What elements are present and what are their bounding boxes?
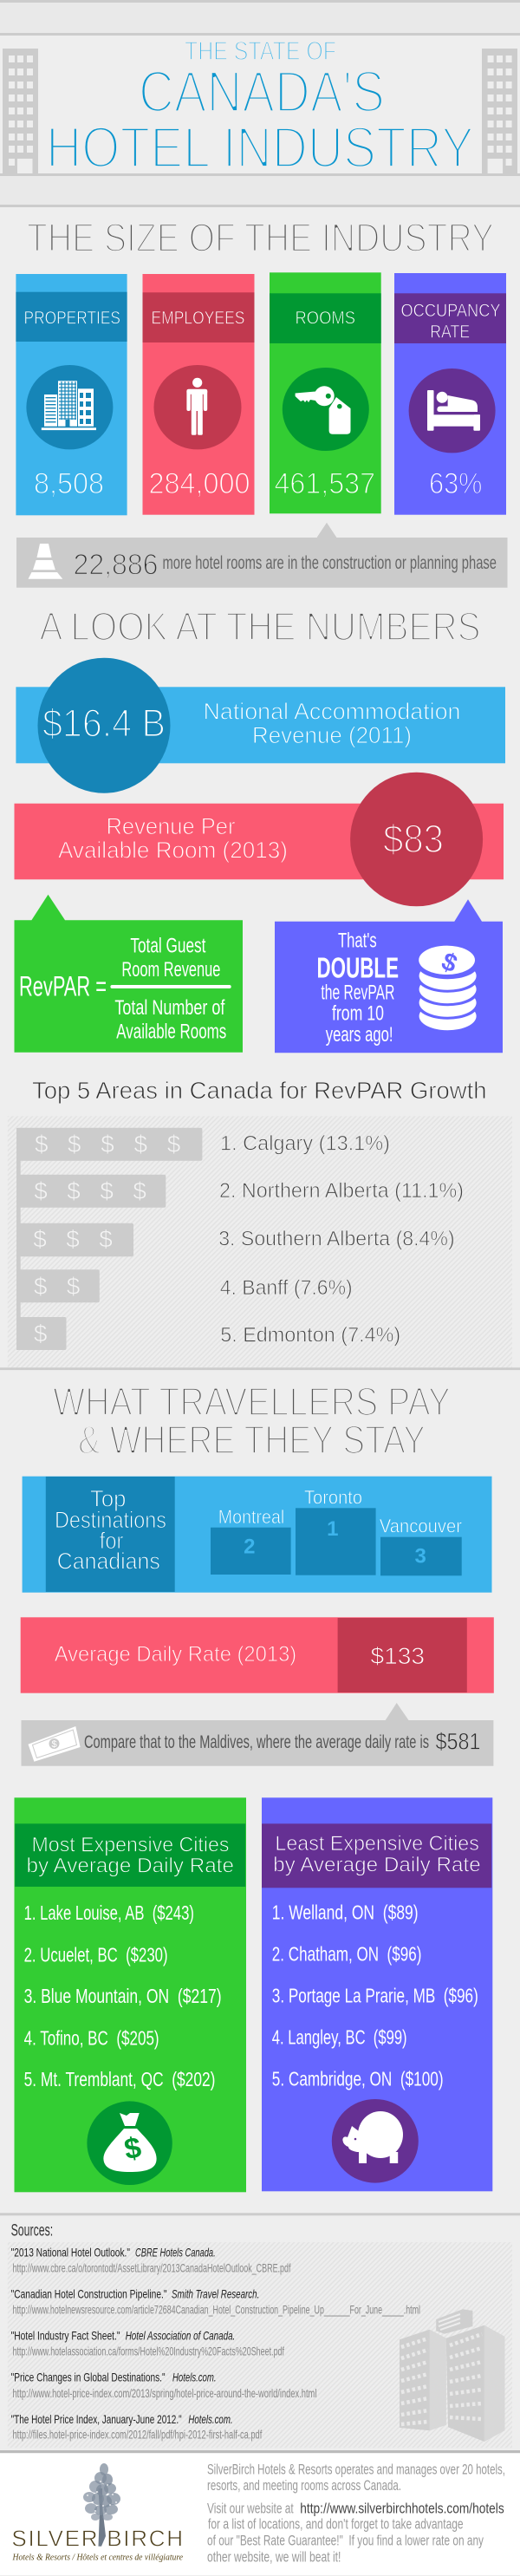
text: double the revpar message: That's	[338, 929, 377, 953]
panel: top 5 areas bar chart	[8, 1116, 512, 1367]
bar: calgary: $	[134, 1131, 148, 1158]
heading: least expensive cities: Least Expensive Cities	[275, 1832, 479, 1855]
number: 22,886: 22,886	[73, 548, 158, 581]
text: top destinations for canadians: for	[100, 1528, 123, 1554]
icon: traffic cone	[28, 544, 62, 579]
text: double the revpar message: DOUBLE	[317, 951, 399, 983]
podium: montreal	[211, 1506, 291, 1575]
text: about silverbirch: resorts, and meeting rooms across Canada.	[207, 2477, 401, 2494]
number: $133: $133	[371, 1643, 425, 1669]
list: least expensive cities: 2. Chatham, ON ($96)	[272, 1942, 421, 1965]
panel: properties	[16, 274, 127, 515]
bar: edmonton	[16, 1317, 400, 1350]
source 4	[11, 2371, 316, 2400]
label: occupancy rate: RATE	[430, 322, 470, 342]
number: employees: 284,000	[149, 467, 250, 500]
icon: coin stack: $	[438, 948, 461, 979]
text: top destinations for canadians	[55, 1486, 166, 1575]
text: national accommodation revenue: Revenue (2011)	[252, 722, 412, 748]
text: numerator: Room Revenue	[121, 958, 220, 981]
text: about silverbirch	[207, 2461, 505, 2566]
source 3: "Hotel Industry Fact Sheet."	[11, 2329, 120, 2343]
text: national accommodation revenue: National Accommodation	[203, 699, 461, 725]
bar: southern alberta: $	[33, 1226, 47, 1252]
source 3: Hotel Association of Canada.	[126, 2329, 235, 2343]
icon: banknote	[28, 1726, 81, 1762]
text: top destinations for canadians: Top	[90, 1486, 126, 1512]
number: $83: $83	[383, 817, 444, 861]
podium: montreal: Montreal	[218, 1506, 284, 1528]
panel: sources list	[8, 2242, 512, 2448]
list: least expensive cities: 4. Langley, BC ($99)	[272, 2026, 407, 2049]
label: properties: PROPERTIES	[24, 308, 120, 328]
bar: southern alberta: 3. Southern Alberta (8.4%)	[218, 1228, 455, 1250]
podium: vancouver	[380, 1516, 462, 1575]
panel: average daily rate	[21, 1617, 494, 1693]
number: occupancy rate: 63%	[429, 467, 482, 500]
icon: birch tree	[83, 2463, 120, 2547]
logo: silverbirch: Hotels & Resorts / Hôtels et centres de villégiature	[12, 2552, 183, 2562]
list: least expensive cities	[272, 1901, 478, 2090]
bar: calgary	[16, 1128, 390, 1161]
panel: top destinations	[23, 1477, 492, 1593]
list: most expensive cities: 5. Mt. Tremblant, QC ($202)	[24, 2068, 215, 2090]
source 1: "2013 National Hotel Outlook."	[11, 2246, 130, 2260]
source 1: CBRE Hotels Canada.	[135, 2246, 216, 2260]
heading: top 5 areas: Top 5 Areas in Canada for RevPAR Growth	[32, 1077, 487, 1104]
heading: least expensive cities: by Average Daily Rate	[273, 1854, 481, 1877]
bar: northern alberta	[16, 1175, 464, 1208]
label: occupancy rate: OCCUPANCY	[400, 301, 501, 321]
panel: occupancy rate	[394, 273, 506, 515]
bar: southern alberta: $	[99, 1226, 113, 1252]
bar: northern alberta: $	[34, 1177, 48, 1204]
title: THE STATE OF	[185, 36, 336, 66]
logo: silverbirch	[11, 2463, 183, 2562]
title	[46, 36, 474, 180]
callout: maldives comparison	[21, 1703, 493, 1766]
list: most expensive cities: 1. Lake Louise, AB ($243)	[24, 1901, 194, 1924]
heading: what travellers pay: & WHERE THEY STAY	[78, 1417, 426, 1462]
panel: double the revpar	[275, 899, 503, 1053]
bar: calgary: $	[35, 1131, 49, 1158]
bar: northern alberta: $	[100, 1177, 114, 1204]
bar: banff: $	[67, 1273, 81, 1300]
podium: toronto: 1	[327, 1517, 338, 1541]
source 1	[11, 2246, 291, 2275]
icon: right hotel building	[482, 49, 517, 173]
bar: banff	[16, 1269, 353, 1302]
text: double the revpar message: from 10	[332, 1002, 384, 1026]
icon: room key and tag	[283, 368, 369, 451]
list: least expensive cities: 5. Cambridge, ON ($100)	[272, 2067, 444, 2090]
icon: piggy bank	[332, 2099, 419, 2183]
icon: left hotel building	[3, 49, 38, 173]
heading: least expensive cities	[273, 1832, 481, 1877]
bar: southern alberta	[16, 1223, 455, 1256]
text: numerator	[121, 935, 220, 981]
panel: revpar formula	[14, 895, 243, 1053]
source 1: http://www.cbre.ca/o/torontodt/AssetLibrary/2013CanadaHotelOutlook_CBRE.pdf	[12, 2261, 291, 2275]
icon: person	[154, 365, 241, 449]
text: revpar: RevPAR =	[19, 970, 107, 1001]
list: most expensive cities	[24, 1901, 222, 2090]
number: $581: $581	[435, 1729, 480, 1755]
bar: southern alberta: $	[66, 1226, 80, 1252]
bar: northern alberta: $	[67, 1177, 81, 1204]
panel: national accommodation revenue	[16, 658, 505, 793]
panel: most expensive cities	[14, 1797, 246, 2192]
header banner	[0, 0, 520, 207]
source 5: "The Hotel Price Index, January-June 2012."	[11, 2412, 182, 2426]
source 4: Hotels.com.	[172, 2371, 217, 2384]
source 5: Hotels.com.	[188, 2412, 233, 2426]
text: denominator: Total Number of	[114, 996, 225, 1020]
label: occupancy rate	[400, 301, 501, 342]
icon: money bag	[87, 2101, 172, 2185]
title: CANADA'S	[139, 59, 385, 125]
bar: edmonton: $	[34, 1320, 48, 1347]
bar: edmonton: 5. Edmonton (7.4%)	[220, 1324, 400, 1347]
text: double the revpar message	[317, 929, 399, 1047]
bar: calgary: 1. Calgary (13.1%)	[220, 1132, 390, 1155]
icon: faded hotel building	[400, 2309, 504, 2442]
heading: most expensive cities: by Average Daily Rate	[26, 1855, 234, 1878]
podium: montreal: 2	[244, 1535, 255, 1558]
label: employees: EMPLOYEES	[151, 308, 244, 328]
list: most expensive cities: 3. Blue Mountain, ON ($217)	[24, 1985, 222, 2007]
text: revenue per available room: Available Room (2013)	[58, 838, 288, 864]
text: about silverbirch: other website, we will beat it!	[207, 2549, 341, 2566]
icon: coin stack	[418, 946, 478, 1030]
heading: most expensive cities: Most Expensive Cities	[31, 1833, 229, 1856]
number: properties: 8,508	[34, 467, 104, 500]
podium: vancouver: Vancouver	[380, 1516, 462, 1537]
source 4: http://www.hotel-price-index.com/2013/spring/hotel-price-around-the-world/index.html	[12, 2386, 316, 2400]
source 2: Smith Travel Research.	[172, 2287, 259, 2301]
text: about silverbirch: Visit our website at	[207, 2500, 294, 2516]
text: denominator	[114, 996, 226, 1044]
podium: vancouver: 3	[415, 1545, 426, 1568]
icon: office buildings	[26, 365, 113, 449]
heading: sources: Sources:	[11, 2221, 53, 2240]
panel: employees	[142, 274, 255, 515]
source 2	[11, 2287, 420, 2317]
text: revenue per available room	[58, 813, 288, 864]
number: $16.4 B: $16.4 B	[42, 701, 166, 746]
icon: person in bed	[409, 368, 496, 453]
text: top destinations for canadians: Destinations	[55, 1507, 166, 1533]
text: numerator: Total Guest	[130, 935, 206, 958]
bar: calgary: $	[68, 1131, 81, 1158]
bar: calgary: $	[101, 1131, 114, 1158]
text: national accommodation revenue	[203, 699, 461, 748]
source 5	[11, 2412, 262, 2442]
number: rooms: 461,537	[274, 467, 375, 500]
heading: what travellers pay	[53, 1379, 451, 1462]
callout: rooms in construction	[16, 523, 508, 588]
panel: least expensive cities	[262, 1797, 492, 2191]
icon: banknote: $	[51, 1739, 57, 1750]
text: double the revpar message: years ago!	[326, 1023, 393, 1047]
bar: calgary: $	[167, 1131, 181, 1158]
source 3: http://www.hotelassociation.ca/forms/Hotel%20Industry%20Facts%20Sheet.pdf	[12, 2344, 284, 2358]
label: rooms: ROOMS	[295, 308, 355, 328]
text: top destinations for canadians: Canadians	[57, 1549, 160, 1575]
bar: northern alberta: $	[133, 1177, 146, 1204]
heading: most expensive cities	[26, 1833, 234, 1878]
text: revenue per available room: Revenue Per	[106, 813, 236, 839]
source 5: http://files.hotel-price-index.com/2012/fall/pdf/hpi-2012-first-half-ca.pdf	[12, 2428, 262, 2442]
source 3	[11, 2329, 284, 2358]
list: most expensive cities: 4. Tofino, BC ($205)	[24, 2026, 159, 2049]
icon: money bag: $	[121, 2131, 144, 2167]
text: average daily rate: Average Daily Rate (2013)	[55, 1642, 296, 1666]
heading: what travellers pay: WHAT TRAVELLERS PAY	[53, 1379, 451, 1424]
panel: rooms	[270, 272, 381, 513]
podium: toronto	[296, 1487, 376, 1575]
bar: banff: $	[34, 1273, 48, 1300]
bar: banff: 4. Banff (7.6%)	[220, 1276, 353, 1300]
logo: silverbirch: SILVER BIRCH	[11, 2526, 183, 2552]
text: denominator: Available Rooms	[116, 1021, 226, 1044]
source 4: "Price Changes in Global Destinations."	[11, 2371, 166, 2384]
podium: toronto: Toronto	[304, 1487, 362, 1509]
list: most expensive cities: 2. Ucuelet, BC ($230)	[24, 1943, 168, 1966]
list: least expensive cities: 1. Welland, ON ($89)	[272, 1901, 419, 1923]
bar: northern alberta: 2. Northern Alberta (11.1%)	[219, 1179, 464, 1203]
text: double the revpar message: the RevPAR	[321, 981, 394, 1004]
source 2: "Canadian Hotel Construction Pipeline."	[11, 2287, 167, 2301]
panel: revenue per available room	[14, 773, 504, 906]
